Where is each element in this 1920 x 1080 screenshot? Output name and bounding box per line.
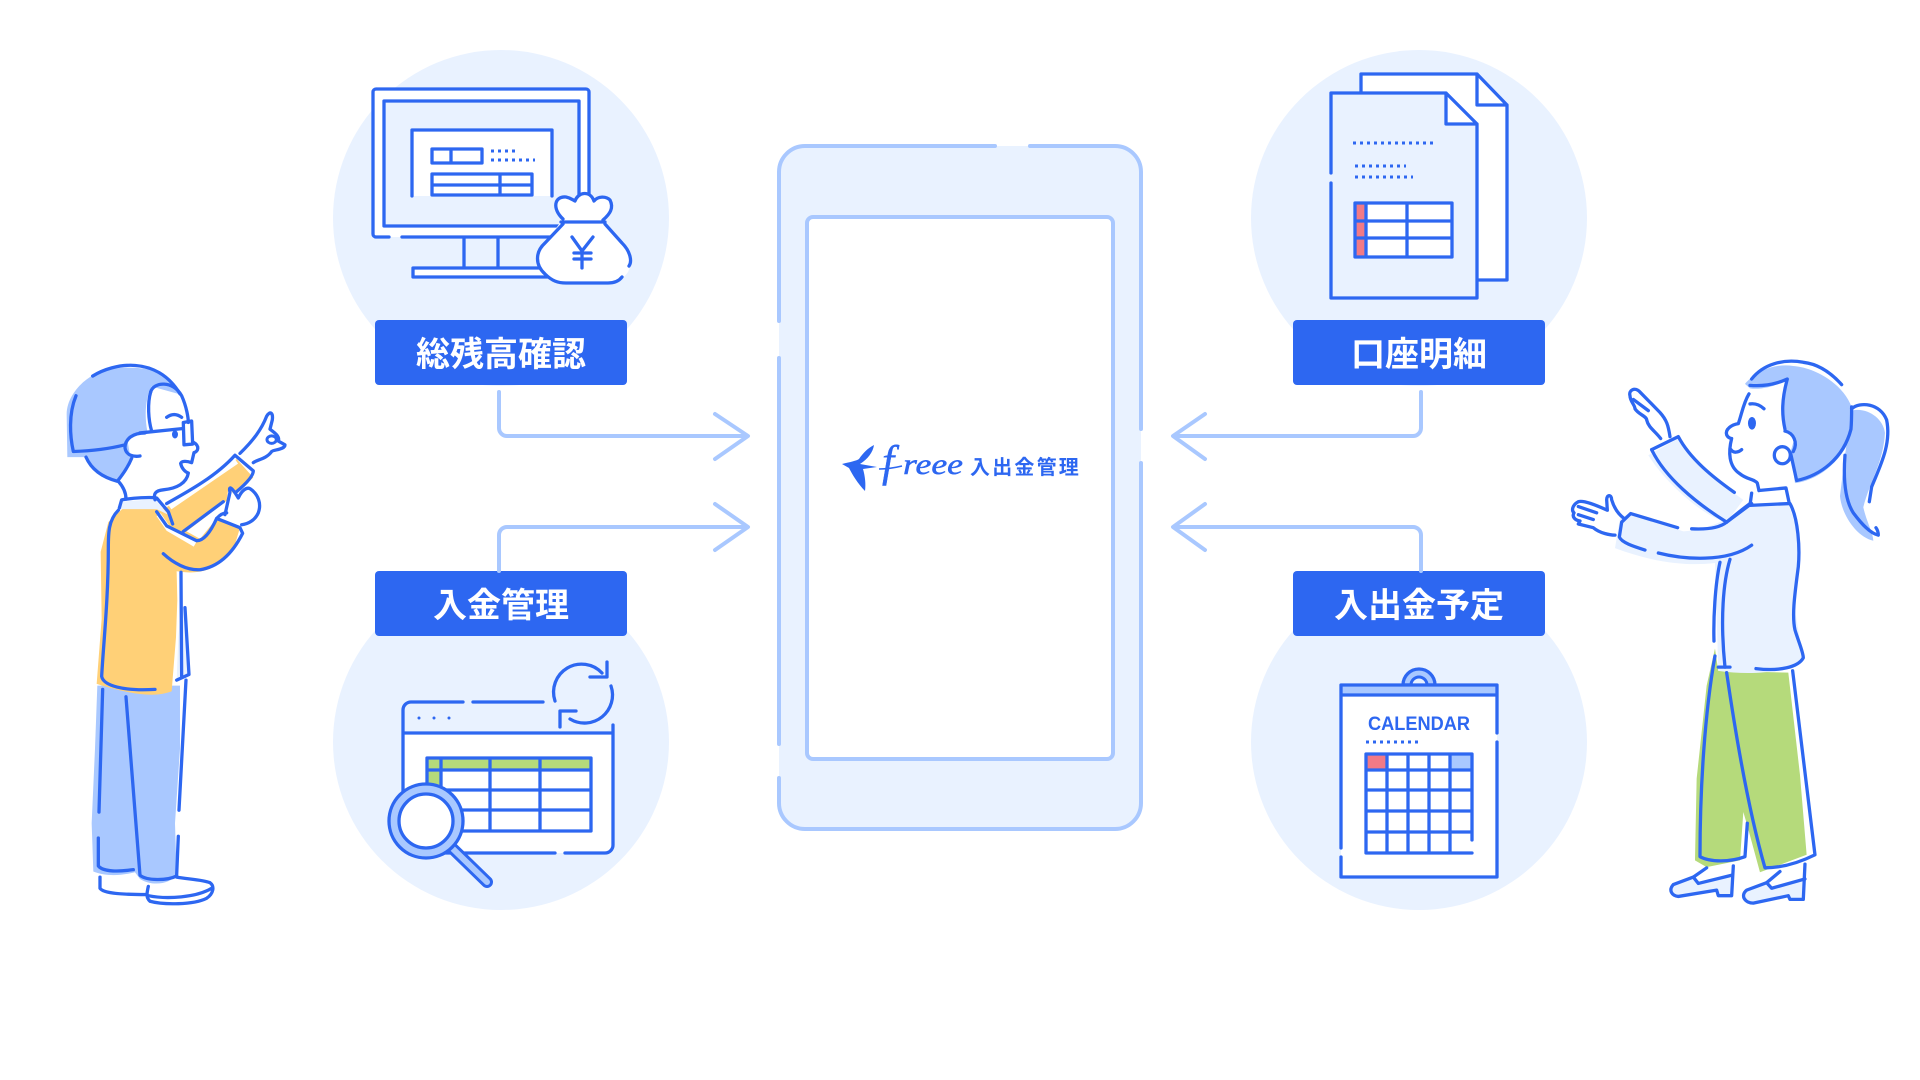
arrow: bottom left to device xyxy=(499,504,748,571)
woman coat sleeve xyxy=(1648,439,1743,522)
character: man pointing xyxy=(67,365,285,904)
icon: calendar xyxy=(1341,669,1497,877)
woman ponytail xyxy=(1840,410,1885,541)
man collar xyxy=(120,499,168,515)
man line art xyxy=(71,365,285,904)
woman trousers xyxy=(1695,649,1807,872)
logo: freee 入出金管理 xyxy=(842,437,1081,491)
logo: freee 入出金管理: f xyxy=(882,437,900,486)
man sleeve highlights xyxy=(159,462,237,544)
label: 入出金予定 xyxy=(1293,571,1545,636)
man trousers xyxy=(92,686,180,884)
panel: background circle top left xyxy=(333,50,669,386)
label: 口座明細 xyxy=(1293,320,1545,385)
panel: background circle top right xyxy=(1251,50,1587,386)
panel: background circle bottom left xyxy=(333,574,669,910)
panel: tablet device xyxy=(779,146,1141,829)
arrow: top left to device xyxy=(499,392,748,459)
woman hair xyxy=(1745,365,1853,483)
icon: calendar: CALENDAR xyxy=(1368,714,1470,735)
woman coat xyxy=(1615,504,1803,673)
character: woman gesturing xyxy=(1573,361,1888,903)
icon: spreadsheet with magnifier and refresh xyxy=(389,662,613,882)
woman line art xyxy=(1573,361,1888,903)
logo: freee 入出金管理: reee xyxy=(903,448,963,481)
man hair xyxy=(67,368,178,481)
man jacket xyxy=(97,459,253,695)
arrow: bottom right to device xyxy=(1173,504,1421,571)
label: 口座明細: 口座明細 xyxy=(1351,336,1487,374)
icon: monitor with money bag xyxy=(373,89,631,283)
label: 総残高確認 xyxy=(375,320,627,385)
logo: freee 入出金管理: 入出金管理 xyxy=(970,456,1081,479)
label: 入出金予定: 入出金予定 xyxy=(1334,587,1504,625)
man shirt tail xyxy=(177,608,189,680)
label: 入金管理 xyxy=(375,571,627,636)
arrow: top right to device xyxy=(1173,392,1421,459)
icon: account statement documents xyxy=(1331,74,1507,298)
label: 入金管理: 入金管理 xyxy=(433,587,569,625)
panel: background circle bottom right xyxy=(1251,574,1587,910)
label: 総残高確認: 総残高確認 xyxy=(416,336,586,374)
